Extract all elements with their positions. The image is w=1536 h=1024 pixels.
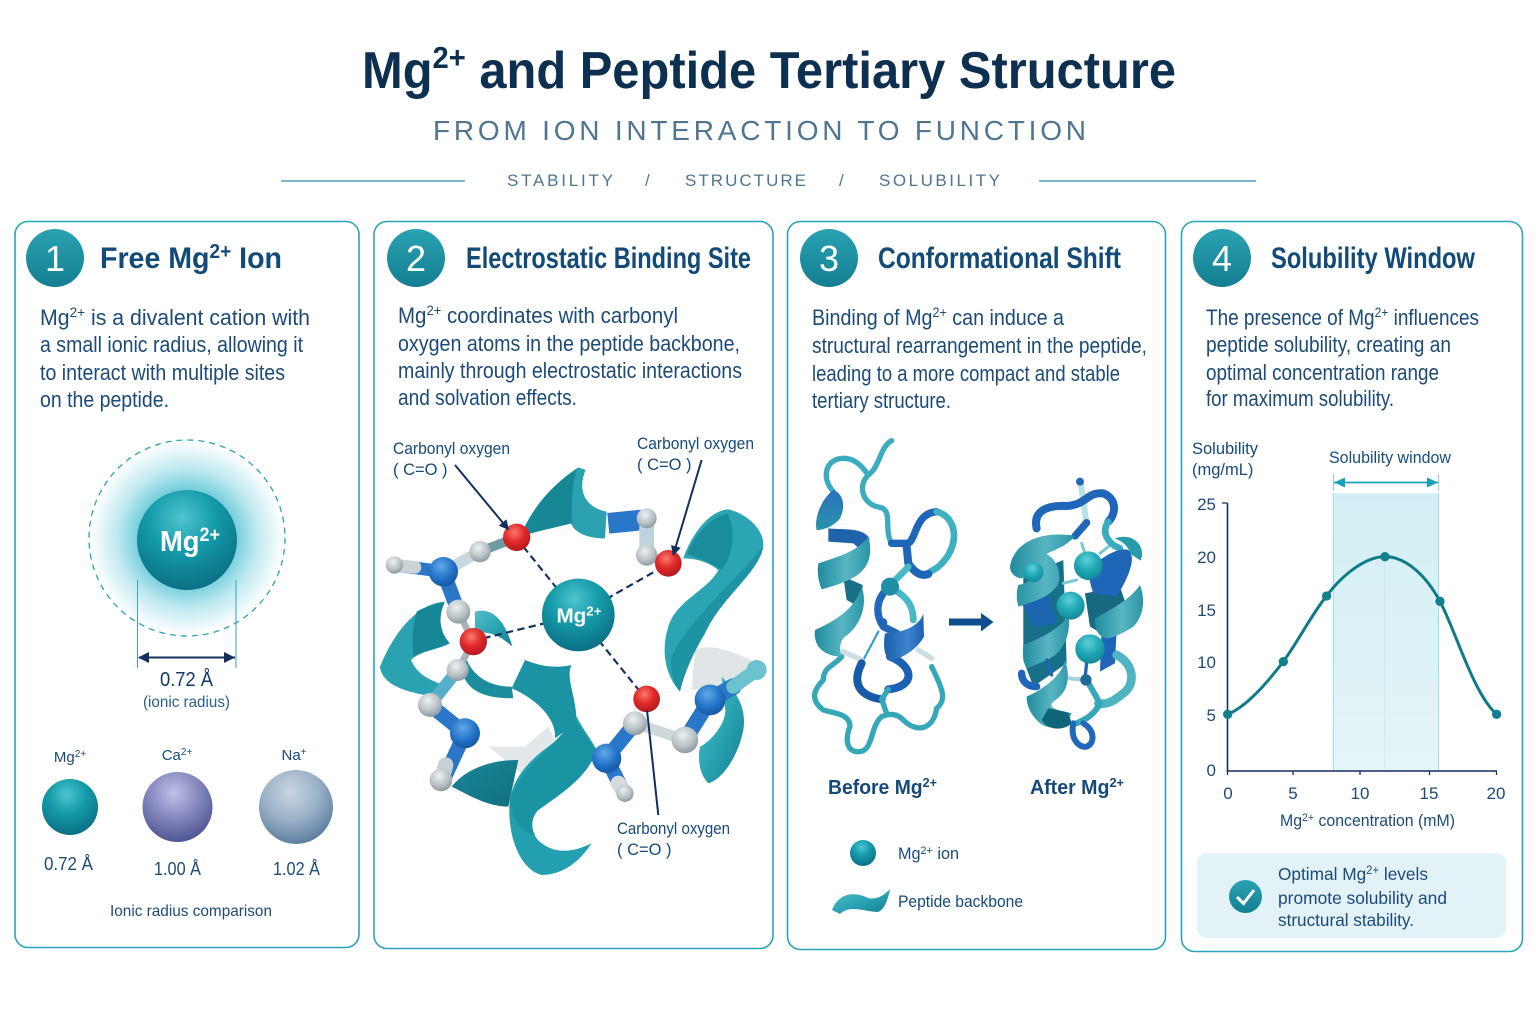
text block 1: [40, 304, 310, 412]
text block 4: optimal concentration range: [1206, 360, 1439, 385]
molecular binding site diagram: [380, 460, 767, 875]
carbonyl oxygen label right: Carbonyl oxygen: [637, 435, 754, 453]
text block 4: influences: [1388, 305, 1479, 330]
before label: 2+: [923, 775, 937, 790]
text block 3: 2+: [932, 304, 947, 320]
number badge 2: [387, 229, 445, 287]
solubility window band: [1329, 449, 1451, 771]
legend: Mg ion: 2+: [921, 845, 933, 857]
ion comparison spheres: +: [301, 747, 307, 758]
ribbon: right helix: [665, 509, 763, 783]
y axis labels: [1197, 495, 1216, 780]
carbonyl oxygen label left: ( C=O ): [393, 461, 448, 479]
solubility chart: [1192, 440, 1505, 830]
panel 1: free Mg ion: [15, 222, 359, 948]
text block 2: Mg: [398, 303, 429, 328]
callout: optimal levels: [1197, 853, 1506, 938]
legend: Mg ion: [850, 840, 959, 866]
ion comparison spheres: 2+: [181, 747, 192, 758]
icon: Mg ion with hydration glow: 2+: [200, 525, 220, 546]
carbonyl oxygen atoms: [460, 524, 682, 712]
x axis labels: 5: [1288, 784, 1298, 803]
y axis labels: 20: [1197, 548, 1216, 567]
text block 4: The presence of Mg: [1206, 305, 1402, 330]
ball and stick chains: [393, 518, 757, 793]
text block 4: peptide solubility, creating an: [1206, 332, 1451, 357]
panel 2: electrostatic binding site: [374, 222, 773, 948]
number badge 3: [800, 229, 858, 287]
x axis labels: [1223, 784, 1505, 803]
x axis title: concentration (mM): [1314, 812, 1455, 830]
panel 3: conformational shift: [788, 222, 1166, 950]
text block 2: mainly through electrostatic interactions: [398, 358, 742, 383]
y axis labels: 0: [1207, 761, 1216, 780]
ion comparison spheres: [42, 747, 333, 879]
carbonyl oxygen label bottom: Carbonyl oxygen: [617, 820, 730, 838]
x axis labels: 15: [1420, 784, 1438, 803]
x axis title: 2+: [1302, 812, 1314, 824]
text block 2: 2+: [426, 302, 441, 318]
solubility curve: [1223, 552, 1501, 769]
y axis labels: 15: [1197, 601, 1216, 620]
heading 3: Conformational Shift: [878, 242, 1121, 275]
legend: Mg ion: ion: [933, 845, 959, 863]
atoms: [386, 508, 767, 802]
arrow: before to after: [949, 613, 994, 632]
text block 3: leading to a more compact and stable: [812, 361, 1120, 386]
x axis labels: 10: [1351, 784, 1369, 803]
ribbon: left helix: [380, 602, 513, 698]
text block 1: to interact with multiple sites: [40, 360, 285, 385]
text block 1: Mg: [40, 305, 71, 330]
number badge 1: [26, 229, 84, 287]
heading 4: Solubility Window: [1271, 242, 1476, 275]
ribbon: centre helix: [509, 660, 597, 875]
label arrows: [455, 460, 702, 815]
text block 2: oxygen atoms in the peptide backbone,: [398, 331, 740, 356]
heading 1: Ion: [231, 242, 282, 275]
solubility window band: Solubility window: [1329, 449, 1451, 467]
number badge 3: 3: [819, 238, 839, 279]
carbonyl oxygen label left: Carbonyl oxygen: [393, 440, 510, 458]
callout text: 2+: [1366, 865, 1379, 877]
y axis labels: 5: [1207, 706, 1216, 725]
coordination bonds: [483, 547, 663, 692]
keyword strip: /: [839, 171, 844, 190]
text block 4: [1206, 304, 1479, 411]
x axis labels: 20: [1487, 784, 1505, 803]
ribbon: lower left: [452, 727, 555, 807]
number badge 4: [1193, 229, 1251, 287]
after label: After Mg: [1030, 777, 1111, 799]
text block 3: [812, 304, 1147, 413]
callout text: [1278, 864, 1447, 930]
text block 1: on the peptide.: [40, 387, 169, 412]
heading 1: 2+: [210, 241, 231, 263]
heading 2: Electrostatic Binding Site: [466, 242, 751, 275]
keyword strip: STABILITY: [507, 171, 613, 190]
ion comparison spheres: 2+: [75, 749, 86, 760]
icon: check mark: [1229, 880, 1262, 913]
text block 4: for maximum solubility.: [1206, 386, 1394, 411]
ion comparison spheres: Ca: [162, 747, 181, 764]
y axis title: (mg/mL): [1192, 461, 1253, 479]
ion comparison spheres: 1.02 Å: [273, 858, 321, 879]
keyword strip: /: [645, 171, 650, 190]
carbonyl oxygen label right: ( C=O ): [637, 456, 692, 474]
x axis labels: 0: [1223, 784, 1233, 803]
title: and Peptide Tertiary Structure: [466, 42, 1176, 100]
radius dimension: 0.72 Å: [160, 668, 214, 691]
icon: Mg ion with hydration glow: Mg: [160, 526, 202, 558]
y axis labels: 10: [1197, 653, 1216, 672]
text block 4: 2+: [1375, 304, 1388, 320]
axes: [1222, 503, 1497, 775]
ion comparison spheres: 0.72 Å: [44, 853, 94, 874]
number badge 2: 2: [406, 238, 426, 279]
after label: 2+: [1109, 775, 1124, 790]
keyword strip: SOLUBILITY: [879, 171, 1000, 190]
text block 2: coordinates with carbonyl: [441, 303, 678, 328]
legend: peptide backbone: Peptide backbone: [898, 893, 1023, 911]
title: 2+: [433, 40, 466, 75]
helix back faces: [1023, 560, 1067, 687]
ribbon: top: [523, 467, 607, 538]
callout text: Optimal Mg: [1278, 864, 1367, 884]
y axis labels: 25: [1197, 495, 1216, 514]
radius dimension: [138, 580, 236, 711]
before label: Before Mg: [828, 777, 926, 799]
central Mg ion: [542, 579, 615, 651]
keyword strip: [281, 171, 1256, 190]
text block 3: structural rearrangement in the peptide,: [812, 333, 1147, 358]
ion comparison spheres: 1.00 Å: [154, 858, 202, 879]
callout text: structural stability.: [1278, 910, 1414, 930]
text block 1: 2+: [70, 304, 85, 320]
text block 2: [398, 302, 742, 410]
text block 1: a small ionic radius, allowing it: [40, 332, 303, 357]
heading 1: Free Mg: [100, 242, 215, 275]
radius dimension: (ionic radius): [143, 694, 230, 711]
number badge 4: 4: [1212, 238, 1232, 279]
text block 3: tertiary structure.: [812, 388, 951, 413]
title: Mg: [362, 42, 437, 100]
peptide before Mg: [815, 441, 954, 752]
ion comparison spheres: Mg: [54, 749, 75, 766]
text block 1: is a divalent cation with: [85, 305, 310, 330]
central Mg ion: 2+: [586, 603, 602, 618]
legend: peptide backbone: [832, 889, 1023, 914]
comparison caption: Ionic radius comparison: [110, 903, 272, 920]
legend: Mg ion: Mg: [898, 845, 921, 863]
text block 2: and solvation effects.: [398, 385, 577, 410]
text block 3: can induce a: [947, 305, 1065, 330]
carbonyl oxygen label bottom: ( C=O ): [617, 841, 672, 859]
y axis title: Solubility: [1192, 440, 1259, 458]
icon: Mg ion with hydration glow: [89, 440, 285, 636]
peptide after Mg: [1010, 478, 1143, 747]
subtitle: FROM ION INTERACTION TO FUNCTION: [433, 115, 1086, 146]
callout text: promote solubility and: [1278, 888, 1447, 908]
central Mg ion: Mg: [556, 605, 586, 628]
number badge 1: 1: [45, 238, 65, 279]
x axis title: Mg: [1280, 812, 1303, 830]
callout text: levels: [1379, 864, 1428, 884]
ion comparison spheres: Na: [281, 747, 301, 764]
keyword strip: STRUCTURE: [685, 171, 806, 190]
panel 4: solubility window: [1182, 222, 1522, 952]
text block 3: Binding of Mg: [812, 305, 947, 330]
